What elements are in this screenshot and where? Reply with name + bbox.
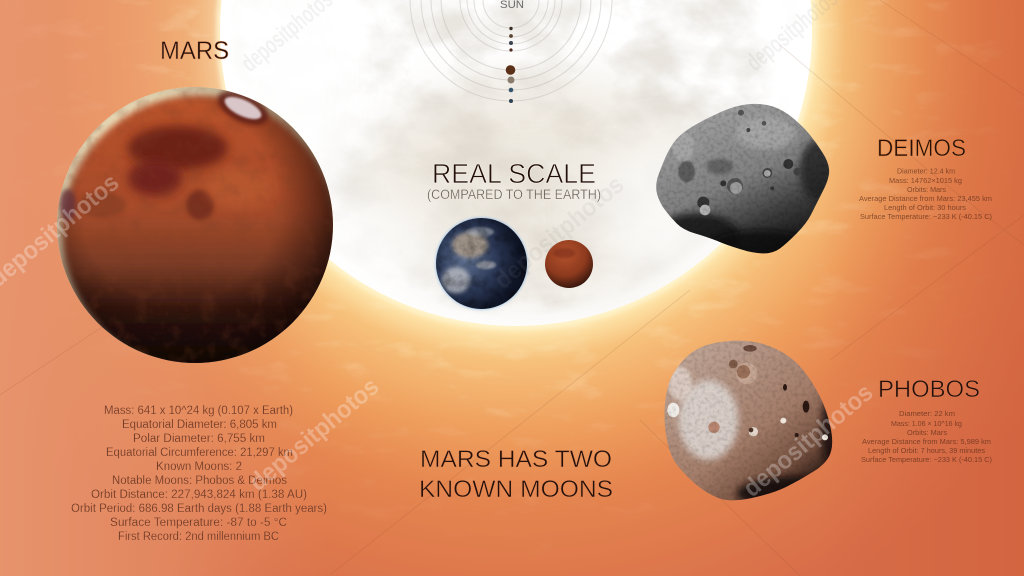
text block: Deimos facts: Surface Temperature: ~233 K (-40.15 C) — [860, 212, 992, 221]
text block: Mars facts: Surface Temperature: -87 to -5 °C — [110, 517, 287, 529]
watermarks: depositphotos — [244, 372, 384, 497]
text block: Deimos facts — [859, 166, 992, 221]
text block: Phobos facts — [861, 409, 992, 464]
planet: Earth — [435, 217, 528, 310]
text block: Phobos facts: Surface Temperature: ~233 K (-40.15 C) — [861, 455, 992, 464]
heading: real scale: REAL SCALE — [432, 158, 596, 189]
caption: two known moons — [419, 446, 613, 503]
watermarks — [0, 0, 878, 503]
text block: Deimos facts: Mass: 14762×1015 kg — [889, 176, 962, 185]
watermarks: depositphotos — [738, 378, 878, 503]
text block: Mars facts: Polar Diameter: 6,755 km — [133, 433, 265, 445]
text block: Mars facts: Equatorial Circumference: 21,297 km — [106, 447, 293, 459]
text block: Mars facts: Equatorial Diameter: 6,805 km — [122, 419, 277, 431]
text block: Mars facts: Mass: 641 x 10^24 kg (0.107 x Earth) — [104, 405, 293, 417]
watermarks: depositphotos — [489, 170, 629, 295]
sun disc — [216, 0, 820, 330]
solar system diagram — [410, 0, 612, 103]
caption: two known moons: MARS HAS TWO — [420, 446, 612, 473]
text block: Deimos facts: Average Distance from Mars: 23,455 km — [859, 194, 992, 203]
planet: small Mars to scale — [545, 240, 593, 288]
heading: Phobos: PHOBOS — [878, 376, 980, 403]
text block: Phobos facts: Average Distance from Mars: 5,989 km — [862, 437, 991, 446]
text block: Phobos facts: Mass: 1.06 × 10^16 kg — [891, 419, 962, 428]
text block: Phobos facts: Orbits: Mars — [907, 428, 947, 437]
text block: Mars facts — [71, 405, 327, 543]
text block: Mars facts: Orbit Period: 686.98 Earth days (1.88 Earth years) — [71, 503, 327, 515]
text block: Phobos facts: Length of Orbit: 7 hours, 39 minutes — [868, 446, 985, 455]
text block: Mars facts: First Record: 2nd millennium BC — [118, 531, 279, 543]
planet: Mars — [57, 84, 336, 369]
subheading: (COMPARED TO THE EARTH) — [427, 186, 601, 202]
text block: Mars facts: Known Moons: 2 — [156, 461, 242, 473]
text block: Mars facts: Orbit Distance: 227,943,824 km (1.38 AU) — [91, 489, 307, 501]
text block: Mars facts: Notable Moons: Phobos & Deimos — [112, 475, 287, 487]
text block: Deimos facts: Orbits: Mars — [907, 185, 946, 194]
heading: real scale — [427, 158, 601, 202]
heading: Mars: MARS — [160, 37, 229, 65]
caption: two known moons: KNOWN MOONS — [419, 476, 613, 503]
text block: Phobos facts: Diameter: 22 km — [899, 409, 955, 418]
planet dots — [506, 27, 515, 103]
text block: Deimos facts: Length of Orbit: 30 hours — [884, 203, 966, 212]
text block: Deimos facts: Diameter: 12.4 km — [897, 166, 955, 176]
moon: Phobos — [664, 340, 832, 500]
moon: Deimos — [656, 104, 830, 254]
heading: Deimos: DEIMOS — [877, 135, 966, 162]
